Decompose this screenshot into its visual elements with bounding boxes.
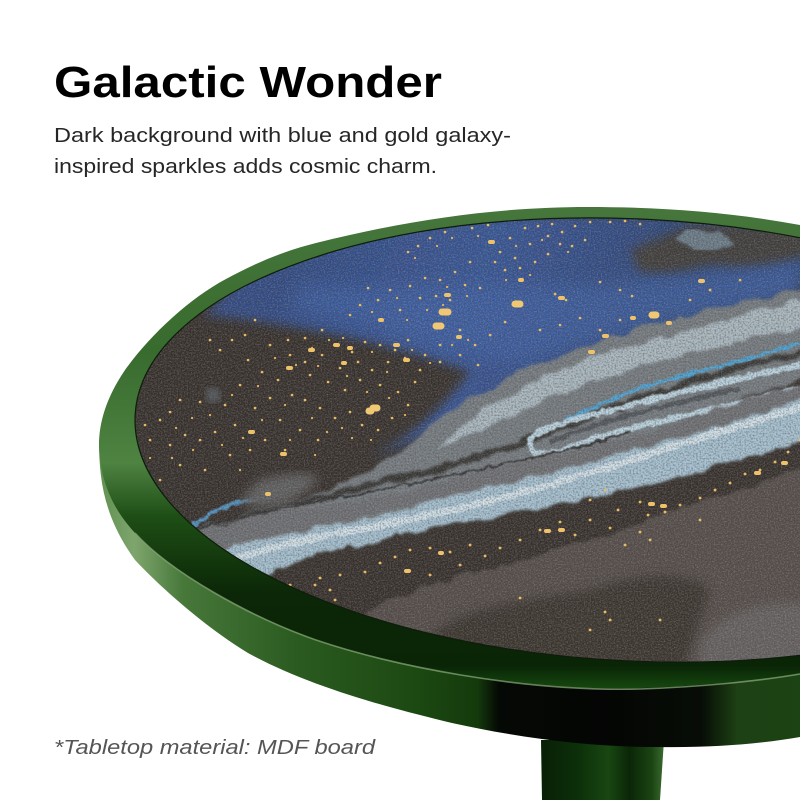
blue vein bbox=[565, 343, 800, 420]
footnote: *Tabletop material: MDF board bbox=[54, 736, 376, 759]
lower gray texture bbox=[364, 468, 800, 662]
tabletop surface bbox=[120, 200, 800, 680]
upper right dark patch bbox=[630, 225, 800, 272]
gray smudge left bbox=[240, 474, 317, 507]
big pale blue band bbox=[224, 397, 800, 576]
blue nebula bbox=[205, 215, 800, 458]
tabletop shadow edge bbox=[134, 217, 800, 662]
rim highlight bbox=[135, 533, 800, 689]
grain texture dark bbox=[120, 200, 800, 680]
description text: Dark background with blue and gold galaxy- bbox=[54, 124, 511, 147]
grain texture light bbox=[120, 200, 800, 680]
rim outer side bbox=[99, 440, 800, 747]
small moon spot bbox=[206, 388, 220, 402]
gray swirl band bbox=[190, 290, 800, 550]
rim top face bbox=[99, 207, 800, 688]
dark base bbox=[136, 218, 800, 615]
gold sparkles large bbox=[250, 242, 786, 571]
swirl dark inner bbox=[550, 388, 740, 442]
lower dark patch bbox=[430, 572, 710, 662]
light swirl core bbox=[435, 298, 800, 450]
gold sparkles small bbox=[145, 221, 740, 480]
gold sparkle patches bbox=[369, 304, 656, 411]
dark stripes bbox=[195, 350, 800, 532]
upper pale cloud bbox=[675, 230, 735, 249]
lower right pale speckle bbox=[700, 604, 800, 670]
description text bbox=[54, 124, 511, 178]
pale band highlight bbox=[225, 404, 800, 562]
description text: inspired sparkles adds cosmic charm. bbox=[54, 155, 437, 178]
gold sparkles denser layer bbox=[150, 236, 568, 470]
blue left streak bbox=[191, 498, 258, 528]
table stem bbox=[541, 740, 664, 800]
title: Galactic Wonder bbox=[54, 58, 442, 107]
gold sparkles lower line bbox=[280, 440, 800, 630]
gray band thin streaks bbox=[200, 432, 630, 528]
lower gray band bbox=[194, 380, 800, 555]
table product illustration bbox=[99, 194, 800, 800]
bright blue glow bbox=[290, 255, 800, 365]
swirl loop bbox=[529, 365, 800, 454]
